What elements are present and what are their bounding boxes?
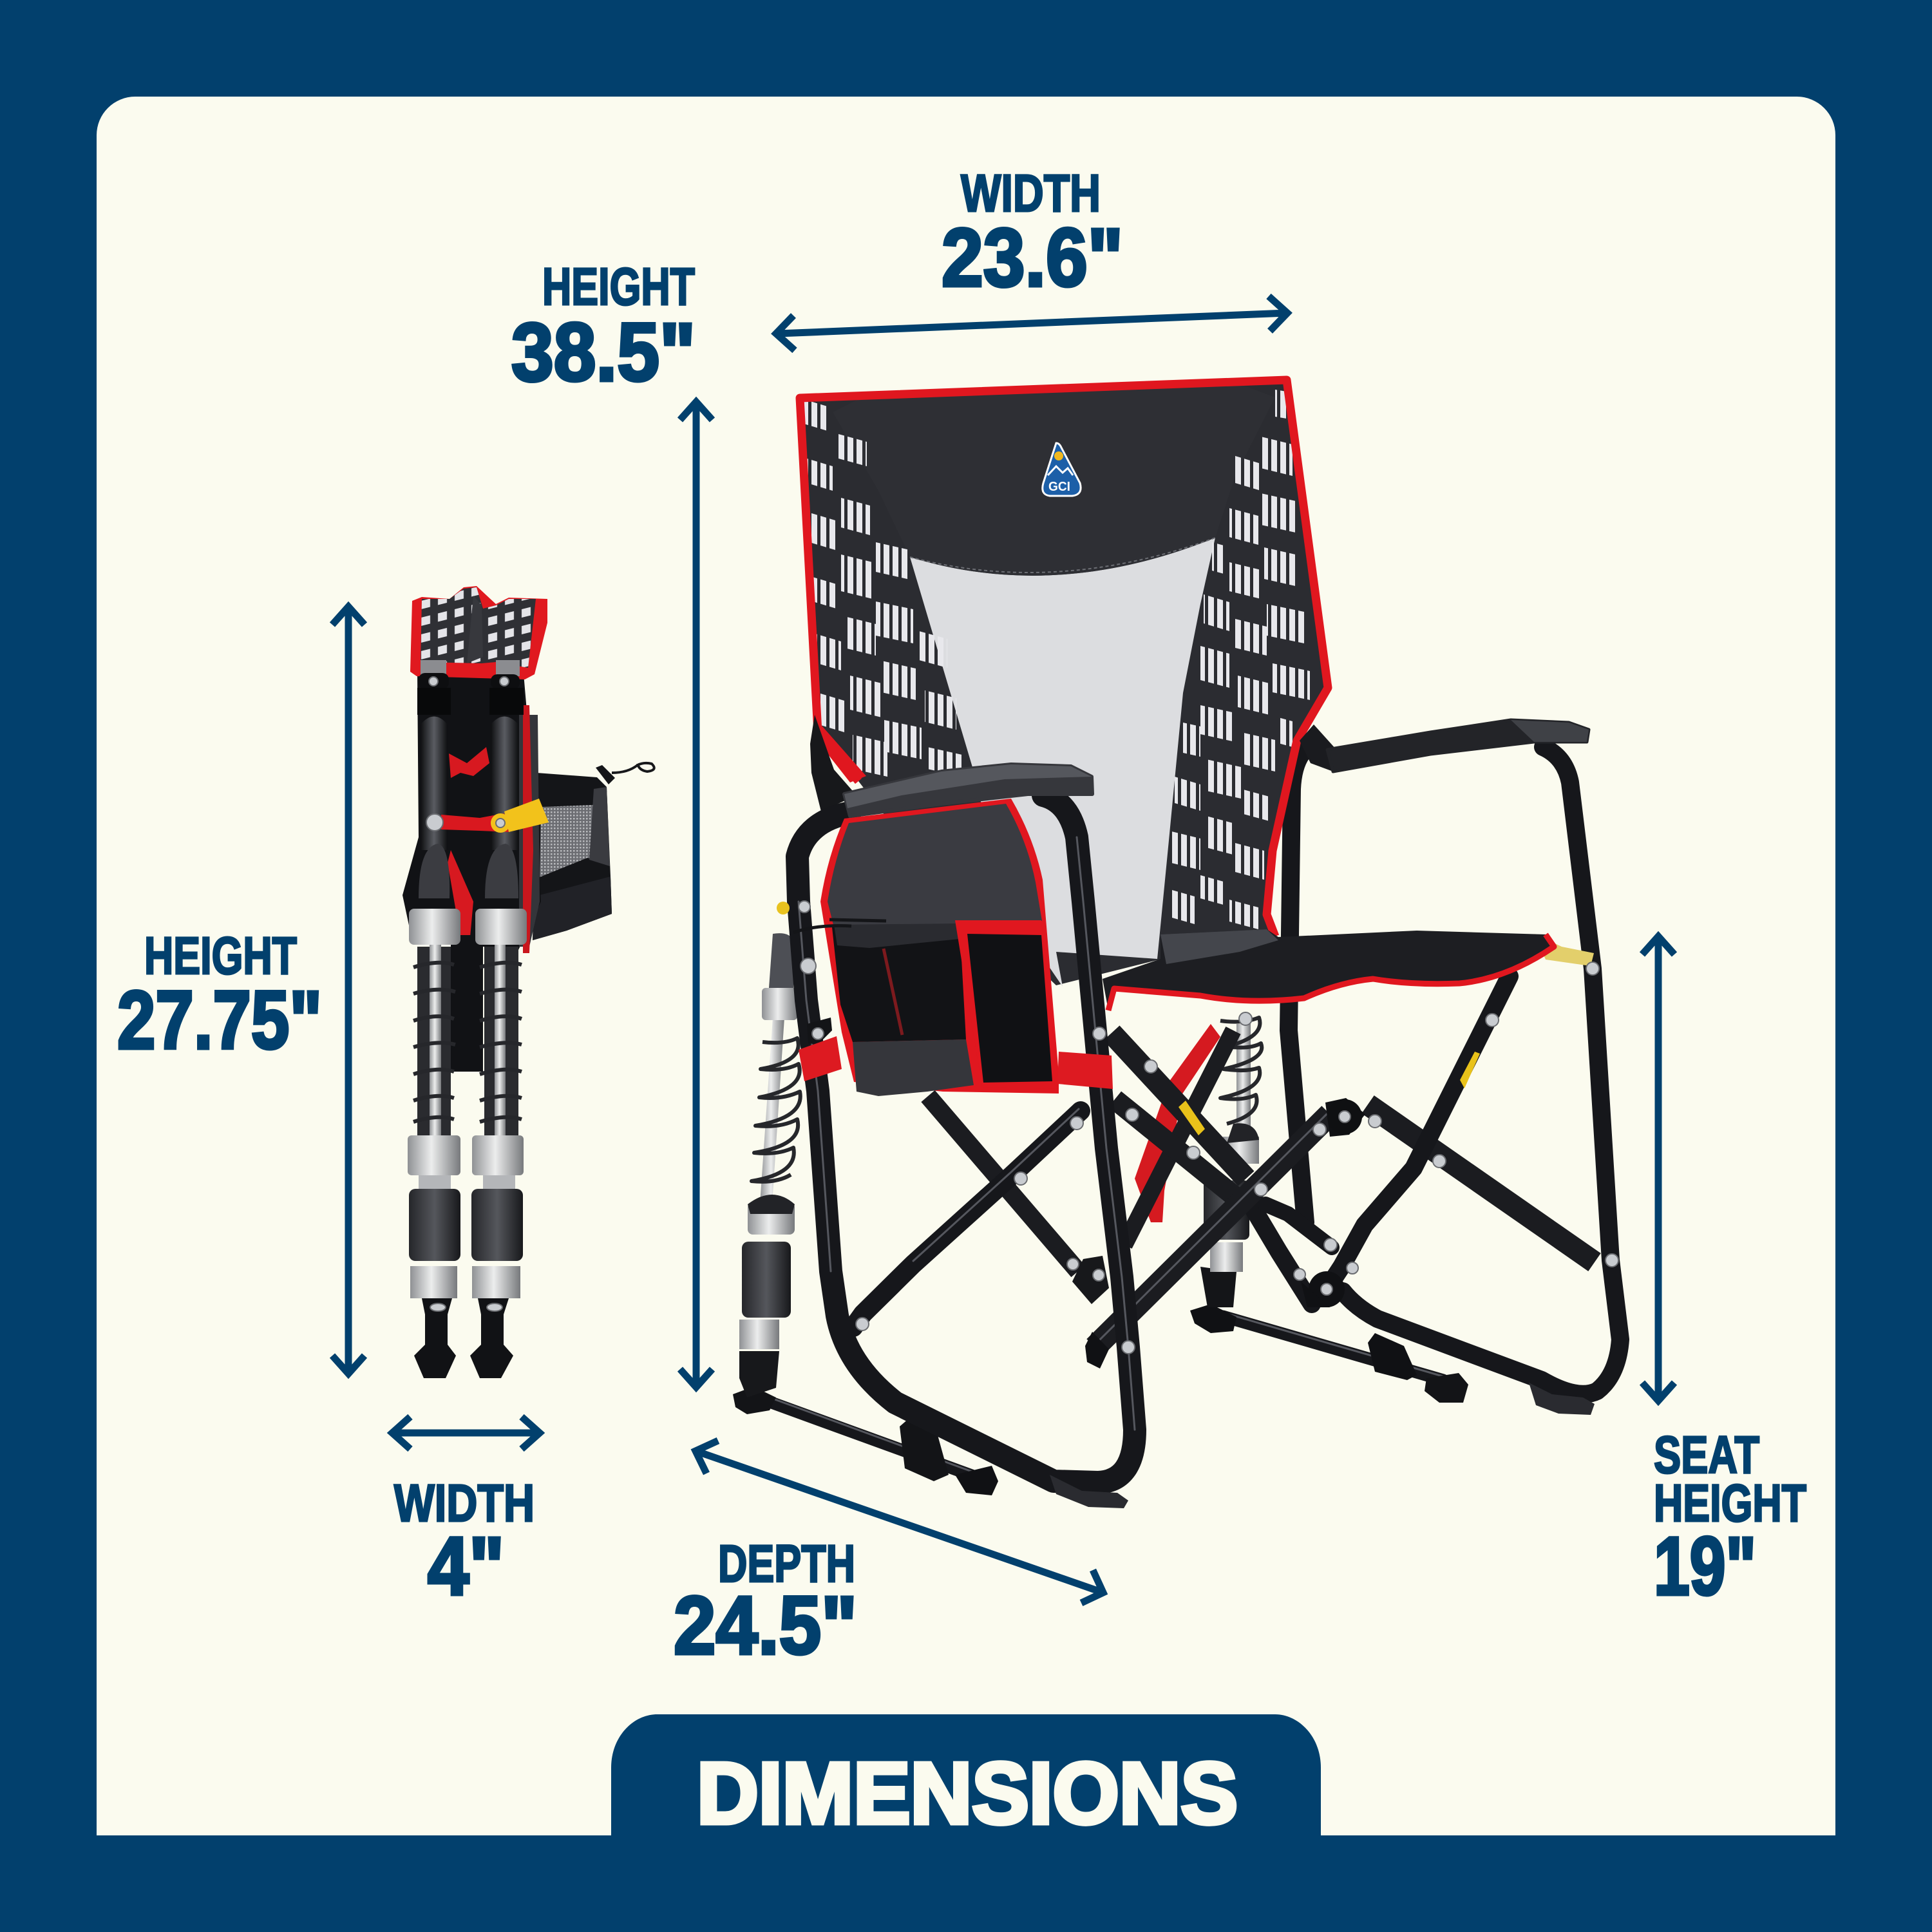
- arrow: depth: [696, 1441, 1103, 1603]
- arrow: folded height: [332, 607, 365, 1374]
- arrow: seat height: [1642, 936, 1674, 1401]
- GCI badge: [1043, 443, 1081, 496]
- far frame tube: [1343, 747, 1620, 1394]
- label: folded height: 27.75": [117, 974, 322, 1066]
- far upright: [1289, 747, 1307, 1222]
- label: seat height: 19": [1654, 1520, 1756, 1613]
- folded shoulders: [419, 844, 518, 898]
- back hinge bracket: [810, 715, 857, 811]
- far rocker assembly: [1190, 1018, 1468, 1403]
- label: seat height: SEAT: [1654, 1426, 1759, 1484]
- right pocket: [955, 920, 1059, 1089]
- label: main width: WIDTH: [961, 164, 1101, 223]
- arrow: height: [680, 402, 712, 1387]
- upper dark panel: [833, 384, 1275, 576]
- yellow knob: [777, 902, 790, 914]
- arrow: width: [776, 296, 1287, 350]
- side bag: [793, 799, 1113, 1096]
- red binding: [800, 380, 1328, 936]
- drawcord: [793, 920, 886, 933]
- folded upper tubes: [417, 660, 524, 850]
- label: folded width: WIDTH: [394, 1474, 535, 1533]
- near frame bolts: [799, 901, 1135, 1354]
- label: main height: 38.5": [511, 307, 696, 399]
- cinch band: [834, 923, 960, 948]
- near rocker assembly: [733, 933, 998, 1495]
- title: DIMENSIONS: [697, 1745, 1238, 1842]
- red straps: [799, 1036, 1113, 1089]
- folded silver collars: [408, 909, 527, 1189]
- crossing leg bars: [853, 976, 1595, 1368]
- joint bolts: [856, 962, 1618, 1331]
- folded chair: [402, 586, 654, 1378]
- label: seat height: HEIGHT: [1654, 1474, 1806, 1533]
- folded springs: [413, 940, 522, 1140]
- seat: [1103, 929, 1554, 1010]
- center mesh panel: [910, 538, 1215, 987]
- GCI badge: GCI: [1048, 480, 1070, 494]
- stripe pattern: left: [804, 399, 962, 777]
- folded black cylinders: [409, 1189, 523, 1298]
- label: seat height: [1654, 1426, 1806, 1613]
- folded feet: [414, 1298, 513, 1378]
- label: main width: [942, 164, 1123, 304]
- arrow: folded width: [392, 1417, 540, 1449]
- near arm rest: [844, 764, 1092, 816]
- label: main height: [511, 258, 696, 399]
- warning stickers: [1179, 934, 1594, 1135]
- hinge clip: [807, 1018, 832, 1045]
- rocking chair: [733, 379, 1620, 1508]
- near frame foot: [1050, 1475, 1128, 1508]
- lower band: [853, 1039, 974, 1096]
- mesh pouch: [533, 763, 654, 940]
- far arm rest: [1300, 720, 1589, 772]
- label: depth: DEPTH: [718, 1535, 855, 1593]
- folded strap with yellow tab: [426, 799, 549, 833]
- near frame tube: [797, 795, 1135, 1482]
- mesh pocket: [832, 923, 966, 1042]
- label: main width: 23.6": [942, 212, 1123, 304]
- red hanging strap: [1135, 1024, 1220, 1222]
- red seam in mesh: [884, 949, 902, 1035]
- label: folded width: 4": [428, 1520, 504, 1613]
- label: folded height: [117, 927, 322, 1066]
- label: folded width: [394, 1474, 535, 1613]
- folded back strap patch: [451, 935, 483, 1072]
- label: depth: [674, 1535, 857, 1672]
- stripe pattern: right: [1169, 390, 1310, 929]
- tab: dimensions title: [611, 1714, 1321, 1842]
- folded body: [402, 674, 541, 950]
- label: depth: 24.5": [674, 1580, 857, 1672]
- label: folded height: HEIGHT: [144, 927, 297, 985]
- backrest: [799, 379, 1328, 987]
- label: main height: HEIGHT: [542, 258, 695, 316]
- far frame foot: [1529, 1383, 1595, 1415]
- near frame highlight: [799, 837, 1135, 1430]
- folded fabric top: [410, 586, 547, 679]
